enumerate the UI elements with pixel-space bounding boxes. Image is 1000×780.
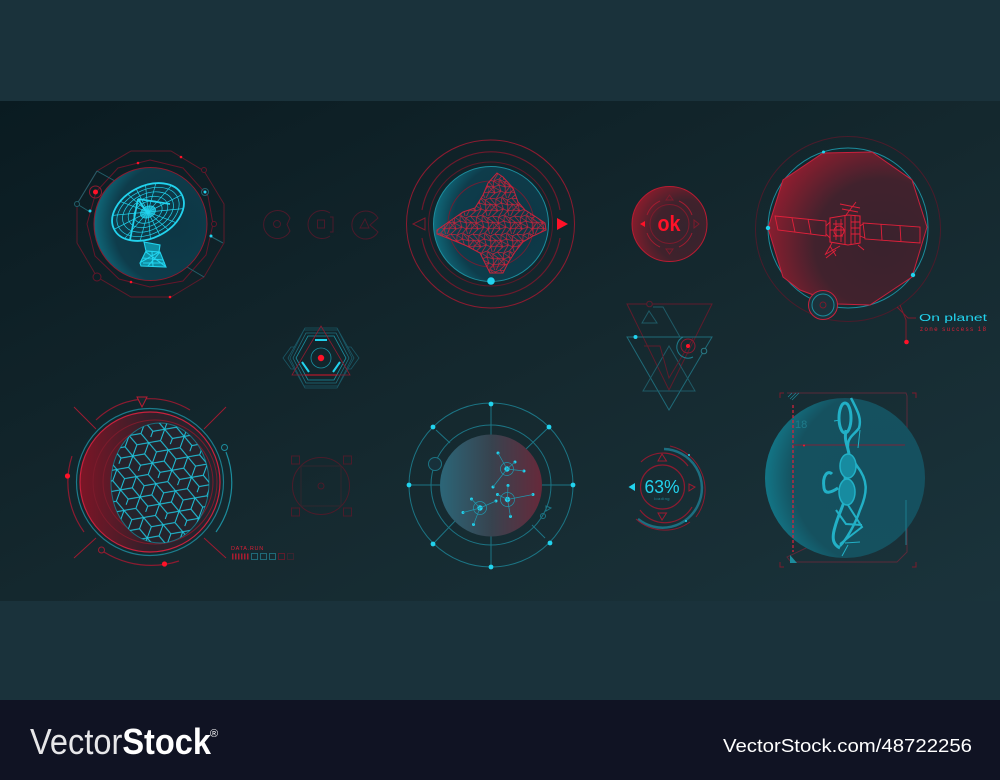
satellite disc xyxy=(768,148,928,308)
dish disc xyxy=(94,168,207,280)
triangle composition xyxy=(627,301,712,410)
ok button xyxy=(632,186,707,262)
satellite markers xyxy=(766,150,916,344)
central dark panel xyxy=(0,101,1000,601)
ok label: ok xyxy=(658,211,681,236)
creature wireframe xyxy=(824,398,866,556)
registered mark: ® xyxy=(210,728,218,740)
mountain wireframe xyxy=(437,173,546,273)
dish markers xyxy=(74,156,216,298)
vectorstock logo: VectorStock xyxy=(30,721,212,762)
sphere markers xyxy=(65,444,228,567)
network sphere xyxy=(440,434,542,536)
network nodes xyxy=(407,402,575,569)
satellite gauge xyxy=(756,136,987,344)
mountain gauge xyxy=(406,140,574,308)
scan number: 18 xyxy=(795,419,807,431)
sphere data bar: DATA.RUN xyxy=(231,546,264,552)
bottom band xyxy=(0,601,1000,700)
hexagon emblem xyxy=(283,326,359,388)
percent caption: loading xyxy=(654,496,670,501)
scan disc xyxy=(765,398,925,558)
creature scan panel xyxy=(765,393,925,567)
network gauge xyxy=(407,402,575,569)
radar dish gauge xyxy=(74,151,224,298)
target reticle xyxy=(292,456,352,516)
red sphere base xyxy=(80,412,220,552)
geodesic cube wireframe xyxy=(111,423,209,543)
percent gauge xyxy=(628,446,705,530)
percent value: 63% xyxy=(644,477,680,497)
top band xyxy=(0,0,1000,101)
cube sphere gauge xyxy=(65,397,294,567)
satellite wireframe xyxy=(775,202,920,258)
satellite caption: On planet xyxy=(919,313,987,324)
satellite caption: zone success 18 xyxy=(920,327,987,333)
mountain arrows and marker xyxy=(413,218,568,285)
dish wireframe icon xyxy=(102,172,194,267)
sphere data bar xyxy=(231,546,294,560)
footer bar xyxy=(0,700,1000,780)
image id: VectorStock.com/48722256 xyxy=(723,736,972,756)
satellite caption xyxy=(919,313,987,333)
three small dial icons xyxy=(264,211,378,239)
mountain disc xyxy=(434,166,548,282)
